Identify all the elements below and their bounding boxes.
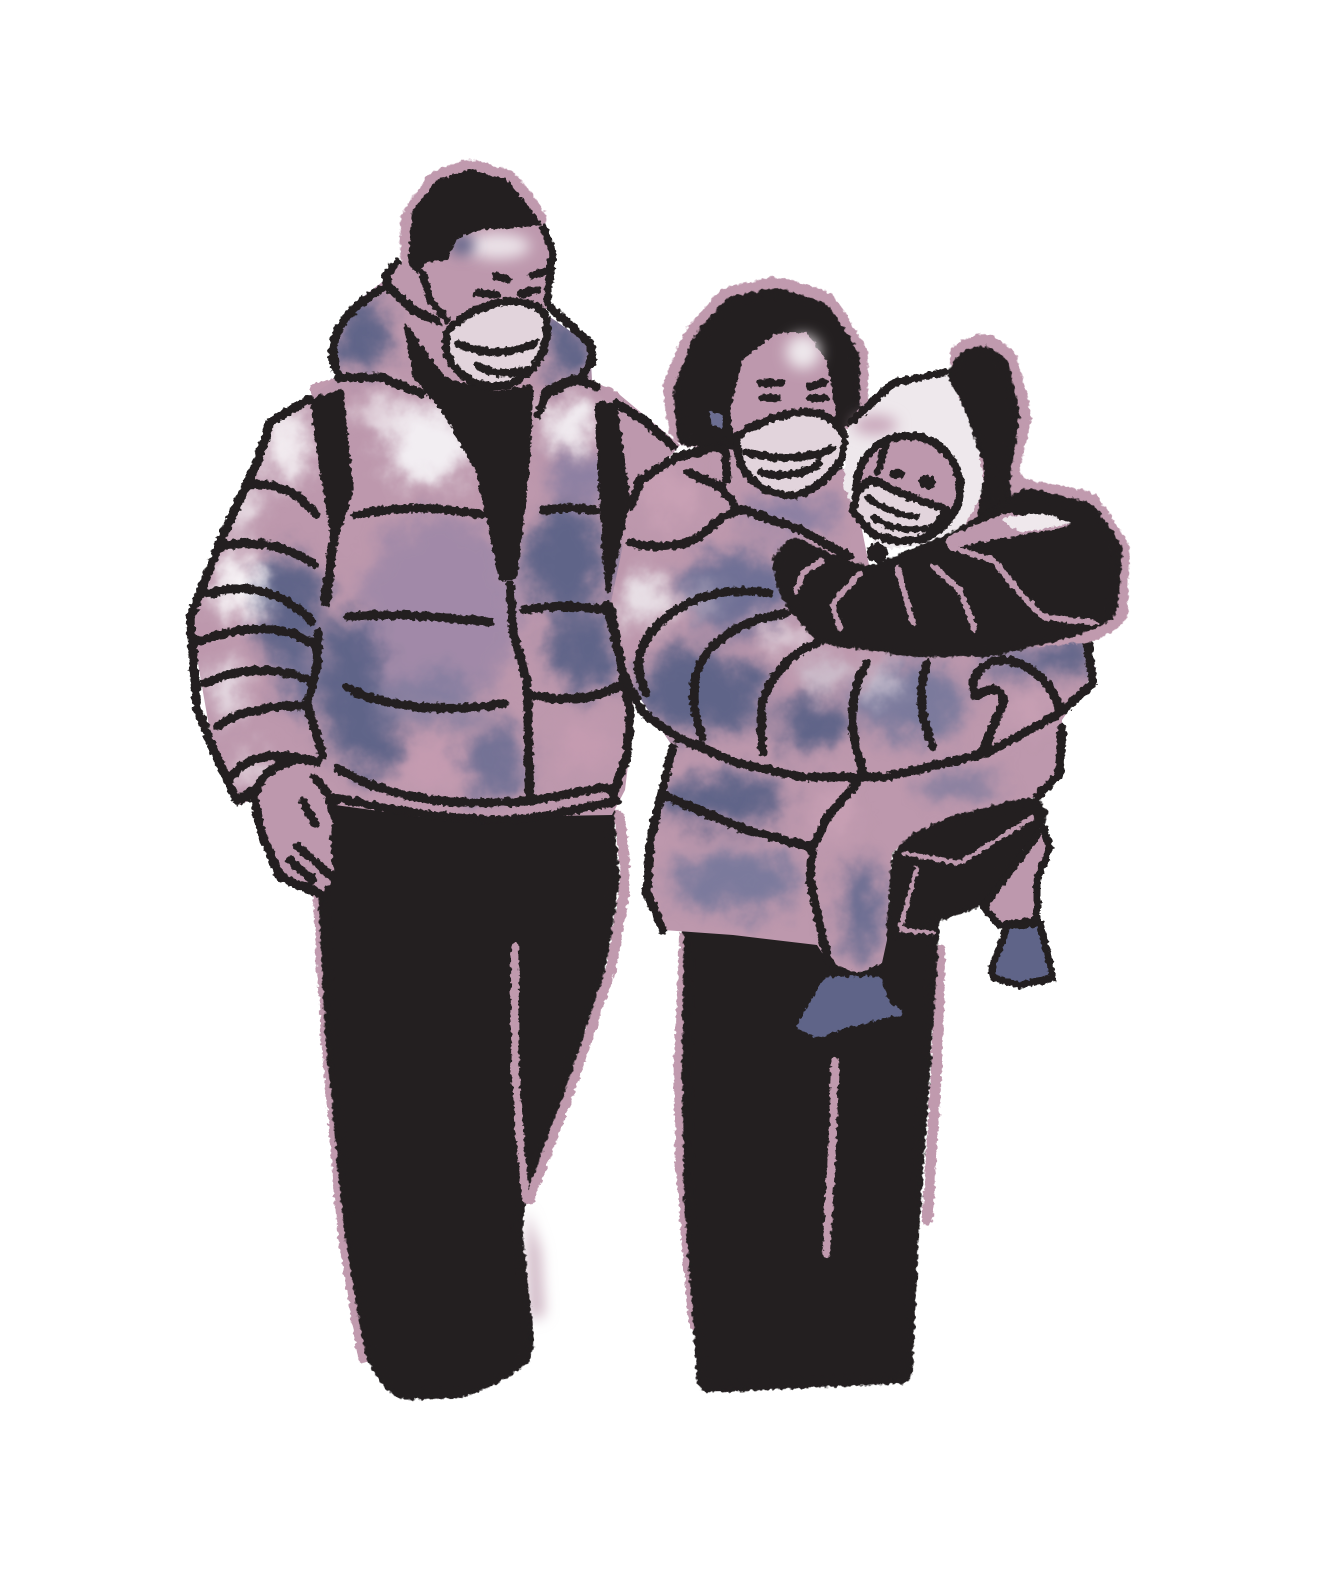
man: face xyxy=(423,225,553,340)
baby: hood outline xyxy=(850,372,947,423)
baby xyxy=(770,332,1130,1038)
man: neck and zipper top xyxy=(403,320,533,582)
baby: mask pleats xyxy=(867,497,927,529)
baby: jacket highlight xyxy=(945,513,1075,548)
man: shoulder halo patches xyxy=(310,378,618,402)
woman: hair xyxy=(673,287,860,470)
man xyxy=(180,158,690,1400)
man: jacket xyxy=(180,255,690,825)
baby: jacket pink seams xyxy=(795,547,1097,630)
man: backpack straps xyxy=(310,389,630,608)
baby: jacket xyxy=(770,487,1123,657)
man: temple shadow xyxy=(450,235,474,255)
man: face edge xyxy=(423,227,553,320)
baby: shorts xyxy=(885,795,1050,945)
man: trouser crease xyxy=(515,945,526,1200)
man: eyes and brows xyxy=(476,271,546,295)
man: head halo xyxy=(400,158,550,265)
man: jacket outlines xyxy=(190,262,673,894)
man: mask pleats xyxy=(457,342,537,373)
man: forehead highlight xyxy=(466,233,530,259)
baby: eyes xyxy=(888,470,936,489)
man: hand xyxy=(253,760,333,894)
man: mask xyxy=(446,302,547,387)
baby: mask xyxy=(853,480,947,541)
woman: trousers pink edge xyxy=(679,935,940,1325)
baby: shorts seam xyxy=(900,817,1033,933)
man: hair xyxy=(408,170,543,275)
woman: face xyxy=(730,333,836,440)
baby: hat bobble xyxy=(945,343,1020,525)
woman: mask pleats xyxy=(745,448,833,475)
woman: ear xyxy=(708,412,724,428)
woman: forehead highlight xyxy=(786,335,820,369)
baby: right leg xyxy=(983,827,1050,925)
woman: jacket xyxy=(611,449,1096,973)
illustration: family of three in puffer jackets wearing masks xyxy=(186,158,1130,1402)
woman: trousers xyxy=(682,915,940,1393)
woman: mask xyxy=(737,412,845,495)
man: trousers fuzzy edge xyxy=(526,1210,544,1320)
woman: trouser crease xyxy=(826,1060,835,1255)
woman: jacket outlines xyxy=(610,440,1093,977)
baby: left foot xyxy=(797,977,906,1038)
woman: hair halo xyxy=(662,276,868,450)
man: trousers xyxy=(318,790,620,1400)
baby: hood shading xyxy=(853,415,897,435)
baby: hood xyxy=(843,372,985,550)
woman xyxy=(600,276,1120,1393)
baby: right foot xyxy=(993,923,1053,985)
man: trousers pink edge xyxy=(318,815,624,1358)
baby: scarf knot xyxy=(867,543,887,563)
baby: jacket white highlight xyxy=(1000,514,1075,532)
baby: hat and jacket halo xyxy=(950,332,1130,650)
woman: eyes and brows xyxy=(759,382,826,398)
baby: hair strand xyxy=(877,442,887,473)
baby: face xyxy=(856,436,960,540)
